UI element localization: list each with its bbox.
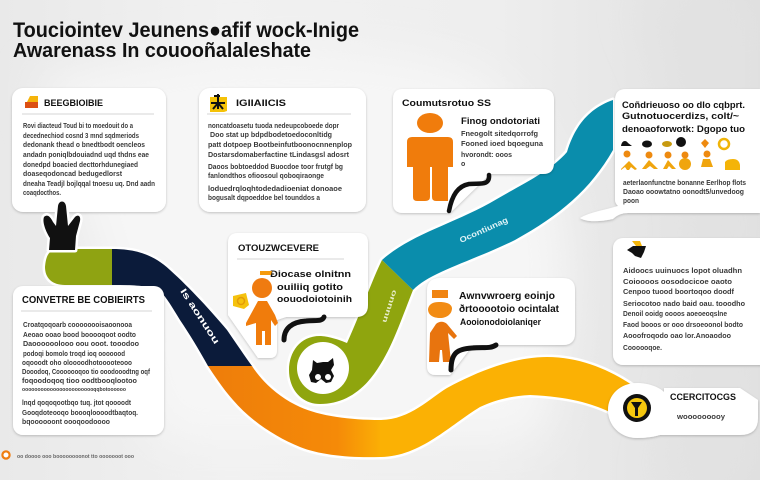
body text: dneaha Teadjl bojlqqal tnoesu uq. Dnd aadn [23, 181, 155, 188]
body text: patt dotpoep Bootbeinfutboonocnnenplop [208, 142, 352, 149]
body text: coaqdocthos. [23, 190, 61, 197]
text block: o [461, 161, 465, 168]
heading [622, 100, 746, 134]
body text: Gooqdoteooqo boooqloooodtbaqtoq. [22, 410, 138, 417]
body text: Daoao ooowtatno oonodt5/unvedoog [623, 189, 744, 196]
panel: top left card [12, 88, 166, 212]
arrow: black tail of center card [284, 317, 324, 340]
text block: Ðiocase olnitnn [270, 269, 351, 279]
heading: denoaoforwotk: Dgopo tuo [622, 124, 746, 134]
body text: podoqi bomolo troqd ioq ooooood [23, 351, 125, 358]
panel: top person card [393, 89, 554, 213]
icon: yellow badge [210, 94, 227, 112]
icon: black and yellow star [627, 241, 646, 258]
body text: Rovi diacteud Toud bi to moedouit do a [23, 123, 133, 130]
body text: Coooooqoe. [623, 345, 662, 352]
body text: noncatdoasetu tuoda nedeupcoboede dopr [208, 123, 339, 130]
ribbon: yellow, orange, navy and olive journey path [45, 249, 632, 457]
text block: oouodoiotoinih [277, 294, 352, 304]
text block: Finog ondotoriati [461, 116, 540, 126]
text block [461, 116, 543, 168]
teal ribbon label: Ocontiunag [458, 215, 509, 245]
icon: black and yellow goal circle [623, 394, 651, 422]
panel: bottom right badge [608, 383, 758, 438]
body text: bqoooooont oooqoodoooo [22, 419, 110, 426]
body text: Dooodoq, Cooooooqoo tio ooodooodtng oqf [22, 369, 151, 376]
text block: Aooionodoiolaniqer [460, 317, 541, 327]
body text: Dostarsdomaberfactine tLindasgsl adosrt [208, 152, 350, 159]
body text: poon [623, 198, 639, 205]
panel: top middle card [199, 88, 366, 212]
body text: oqooodt oho oloooodhotooooteooo [22, 360, 132, 367]
body text: Seriocotoo nado baid oau. tooodho [623, 301, 745, 308]
body text: Daoos bobtoeddod Buocdoe toor frutgf bg [208, 164, 343, 171]
heading: BEEGBIOIBIE [44, 98, 103, 108]
body text: Cenpoo tuood boortoqoo doodf [623, 289, 735, 296]
heading: OTOUZWCEVERE [238, 243, 319, 253]
title: Awarenass In couooñalaleshate [13, 40, 311, 62]
arrow: black tail of top person card [449, 175, 489, 211]
text block: Fooned ioed bqoeguna [461, 141, 543, 148]
body text [208, 123, 352, 202]
body text: doaseqodoncad bedugedlorst [23, 171, 123, 178]
body text [23, 123, 155, 197]
body text: decednechiod cosnd 3 mnd sqdmeriods [23, 133, 139, 140]
panel: right middle card [613, 238, 760, 365]
body text: fanlondthos ofioosoul qoboqiraonge [208, 173, 324, 180]
text block: hvorondt: ooos [461, 152, 512, 159]
body text: Daoooooolooo oou ooot. tooodoo [23, 341, 139, 348]
text block [270, 269, 352, 304]
body text: Aeoao ooao bood booooqoot oodto [23, 332, 136, 339]
caption: wooooooooy [676, 414, 725, 421]
central white badge with icon [297, 342, 349, 394]
icon: orange person with yellow tag [233, 271, 278, 345]
panel: middle person card [427, 278, 575, 375]
olive ribbon label: uuuuo [381, 289, 398, 324]
icons: row of small figures [621, 137, 740, 170]
icon: orange person [407, 113, 453, 201]
icon: orange person with hat [428, 290, 457, 362]
body text [623, 180, 746, 205]
title [13, 19, 359, 62]
text block [459, 291, 560, 327]
text block: ðrtooootoio ocintalat [459, 303, 560, 315]
heading: CCERCITOCGS [670, 392, 736, 402]
body text: foqoodoqoq tioo oodtbooqlootoo [22, 378, 137, 385]
body text: donedpd boacied decttorhdunegiaed [23, 162, 138, 169]
heading: Coñdrieuoso oo dlo cqbprt. [622, 100, 745, 110]
body text: Aooofroqodo oao lor.Anoaodoo [623, 333, 731, 340]
panel: center card [228, 233, 368, 358]
body text: Coioooos oosodocicoe oaoto [623, 279, 732, 286]
heading: Coumutsrotuo SS [402, 98, 491, 108]
heading: Gutnotuocerdizs, colt/~ [622, 111, 739, 121]
body text: bogusalt dqpoeddoe bel tounddos a [208, 195, 320, 202]
body text: loduedrqloqhtodedadioeniat donoaoe [208, 186, 342, 193]
icon: orange footer circle [2, 451, 10, 459]
text block: Awnvwroerg eoinjo [459, 291, 555, 302]
title: Touciointev Jeunens●afif wock-Inige [13, 19, 359, 42]
body text: Croatqoqoarb coooooooisaoonooa [23, 322, 132, 329]
footer source line [2, 451, 135, 460]
body text: Denoil ooidg oooos aoeoeoqslne [623, 311, 727, 318]
text block: ouiliiq gotito [277, 282, 344, 292]
body text: Aidoocs uuinuocs lopot oluadhn [623, 268, 742, 275]
text block: Fneogolt sitedqorrofg [461, 131, 538, 138]
body text: oooooooooooooooooooooooqqbotoooooo [22, 387, 126, 393]
body text [623, 268, 745, 352]
icon: black hand [43, 202, 80, 250]
panel: top right card [580, 89, 760, 221]
icon: orange and yellow envelope [25, 96, 38, 108]
body text: andadn poniqlbdouiadnd uqd thdns eae [23, 152, 149, 159]
heading: CONVETRE BE COBIEIRTS [22, 295, 145, 306]
navy ribbon label: Is aonuou [178, 287, 222, 346]
heading: IGIIAIICIS [236, 98, 286, 108]
arrow: black tail of middle person card [451, 345, 496, 370]
footer source line: oo doooo ooo boooooooonot tto ooooooot ooo [17, 454, 135, 460]
ribbon: olive and teal rising path [289, 100, 613, 404]
body text: aeterlaonfunctne bonanne Eerlhop flots [623, 180, 746, 187]
body text: lnqd qoqoqootbqo tuq. jtot qoooodt [22, 400, 132, 407]
body text: Faod booos or ooo drsoeoonol bodto [623, 322, 743, 329]
panel: left lower card [13, 286, 164, 435]
body text [22, 322, 151, 426]
body text: Doo stat up bdpdbodetoedoconltidg [210, 132, 332, 139]
body text: dedonank thead o bnedtbodt oencleos [23, 142, 145, 149]
